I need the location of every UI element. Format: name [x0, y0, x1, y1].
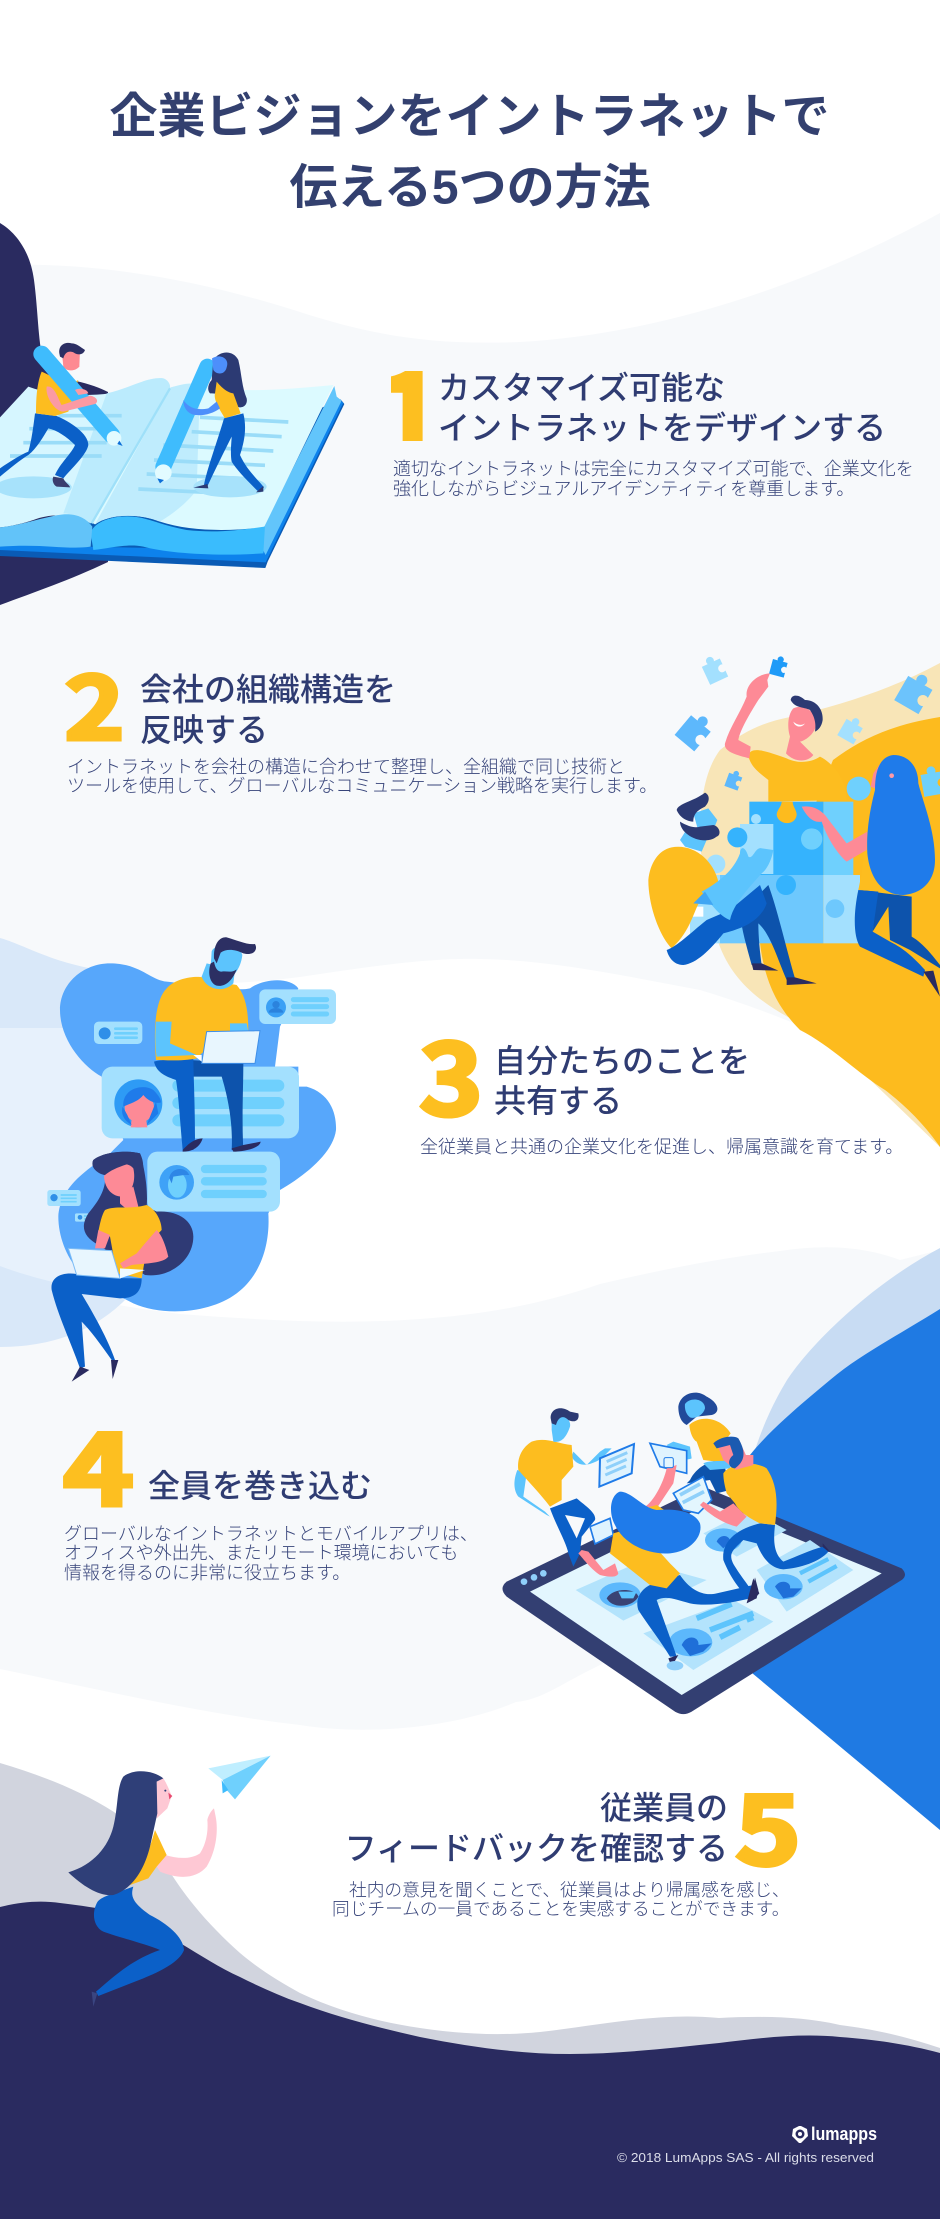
woman	[68, 1771, 217, 2007]
bearded man, right	[673, 1437, 829, 1603]
step 3 text: 共有する	[494, 1083, 622, 1119]
step 3 text	[419, 1002, 903, 1157]
step 5 text: 同じチームの一員であることを実感することができます。	[332, 1899, 789, 1919]
step 1 text: 強化しながらビジュアルアイデンティティを尊重します。	[393, 479, 854, 499]
blue blob	[58, 963, 336, 1311]
illustration: people writing on open book	[0, 343, 344, 568]
step 4 text: 情報を得るのに非常に役立ちます。	[64, 1563, 350, 1583]
man on laptop	[154, 937, 261, 1152]
step 5 text: フィードバックを確認する	[345, 1830, 728, 1866]
step 4 text	[63, 1392, 478, 1583]
heading 3: 自分たちのことを	[494, 1043, 750, 1079]
illustration: team assembling puzzle	[648, 653, 940, 997]
step 2 text: ツールを使用して、グローバルなコミュニケーション戦略を実行します。	[67, 776, 657, 796]
floating puzzle pieces	[675, 653, 940, 797]
woman with tablet, top	[650, 1393, 731, 1493]
big puzzle	[690, 777, 871, 943]
boy with pencil	[0, 343, 123, 487]
step 5 text	[332, 1756, 801, 1919]
number 2: 2	[64, 640, 124, 766]
body 5: 社内の意見を聞くことで、従業員はより帰属感を感じ、	[349, 1880, 790, 1900]
man with tablet, left	[514, 1408, 634, 1567]
body 3: 全従業員と共通の企業文化を促進し、帰属意識を育てます。	[420, 1137, 903, 1157]
man reaching up	[725, 673, 847, 802]
body 4: グローバルなイントラネットとモバイルアプリは、	[64, 1524, 478, 1544]
girl with pencil	[155, 352, 264, 492]
number 4: 4	[63, 1392, 134, 1534]
number 5: 5	[735, 1756, 801, 1892]
paper plane	[208, 1756, 271, 1799]
lumapps wordmark: lumapps	[811, 2124, 877, 2144]
icon: lumapps logo	[792, 2126, 808, 2143]
illustration: team on tablet	[502, 1393, 905, 1714]
heading 5: 従業員の	[600, 1790, 728, 1826]
illustration: woman with paper plane	[68, 1756, 271, 2007]
title: 伝える5つの方法	[289, 162, 651, 214]
tablet	[502, 1487, 905, 1714]
illustration: people and profile cards	[47, 937, 336, 1382]
body 2: イントラネットを会社の構造に合わせて整理し、全組織で同じ技術と	[67, 757, 625, 777]
profile cards	[47, 989, 336, 1222]
body 1: 適切なイントラネットは完全にカスタマイズ可能で、企業文化を	[393, 459, 914, 479]
woman with blue hair, center	[578, 1458, 759, 1670]
title: 企業ビジョンをイントラネットで	[109, 90, 830, 144]
sitting bearded man	[648, 793, 817, 985]
step 1 text: イントラネットをデザインする	[438, 410, 886, 446]
footer logo and copyright	[617, 2124, 877, 2165]
woman with long hair	[802, 755, 940, 997]
number 3: 3	[419, 1002, 483, 1144]
copyright: © 2018 LumApps SAS - All rights reserved	[617, 2150, 874, 2165]
step 2 text: 反映する	[140, 712, 268, 748]
title	[109, 90, 830, 214]
step 1 text	[391, 371, 912, 496]
heading 4: 全員を巻き込む	[148, 1468, 372, 1504]
step 2 text	[64, 640, 657, 796]
heading 1: カスタマイズ可能な	[438, 370, 725, 406]
step 4 text: オフィスや外出先、またリモート環境においても	[64, 1543, 458, 1563]
number 1: 1	[379, 321, 442, 498]
woman on laptop	[51, 1152, 193, 1382]
heading 2: 会社の組織構造を	[140, 672, 396, 708]
